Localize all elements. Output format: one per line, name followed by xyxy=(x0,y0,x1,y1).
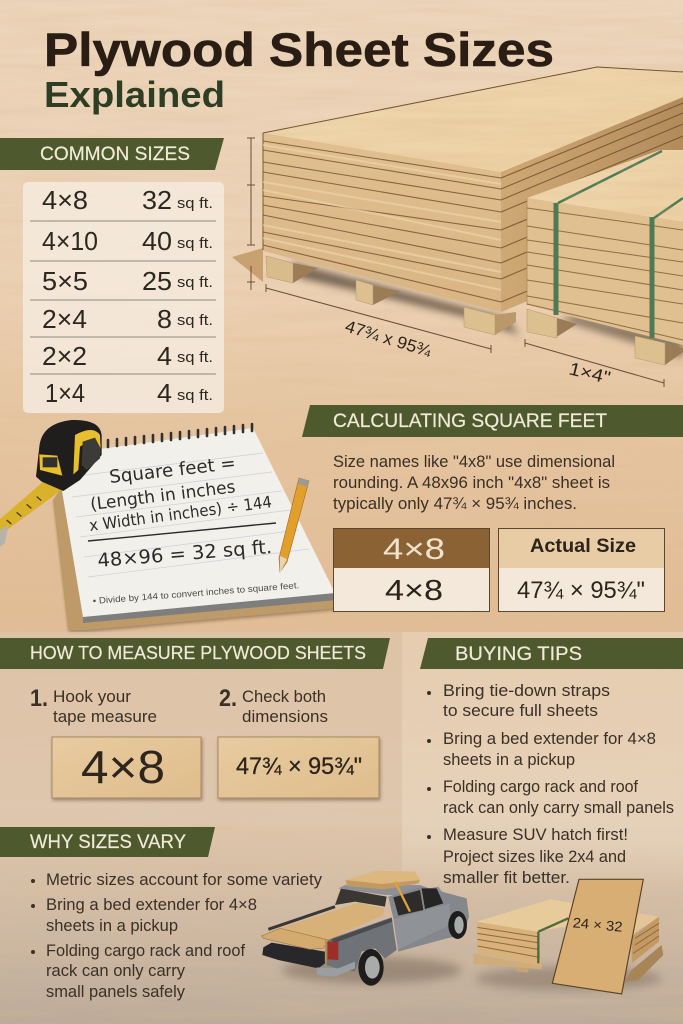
wood sample: actual: 47¾ × 95¾" xyxy=(236,753,362,780)
panel: common sizes xyxy=(0,138,224,413)
comparison box: nominal xyxy=(334,528,490,612)
pallet feet xyxy=(527,309,683,365)
heading: calculating square feet xyxy=(302,405,683,437)
illustration: large plywood stack on pallet xyxy=(232,67,683,335)
formula text: • Divide by 144 to convert inches to square feet. xyxy=(92,580,300,606)
rear wheel xyxy=(358,949,384,986)
heading: why sizes vary xyxy=(0,827,215,857)
dimension lines and labels xyxy=(247,138,664,388)
panel: why sizes vary xyxy=(0,827,322,1001)
step 2: 2. xyxy=(219,685,237,712)
sizes table: 8 xyxy=(157,304,172,334)
panel: how to measure plywood sheets xyxy=(0,632,402,825)
pallet feet xyxy=(266,256,516,335)
illustration: pickup truck with plywood xyxy=(262,871,469,986)
strap xyxy=(538,918,568,963)
formula text xyxy=(88,453,300,606)
heading: common sizes xyxy=(0,138,224,170)
formula text: x Width in inches) ÷ 144 xyxy=(88,492,273,535)
bed rail xyxy=(268,907,335,929)
explanation text: rounding. A 48x96 inch "4x8" sheet is xyxy=(333,473,610,492)
icon: tape measure xyxy=(0,420,102,547)
reasons list: small panels safely xyxy=(46,982,185,1001)
sizes table: sq ft. xyxy=(177,349,213,366)
comparison box: nominal: 4×8 xyxy=(383,533,445,566)
plywood grain on stack tops xyxy=(264,68,683,216)
tips list: Project sizes like 2x4 and xyxy=(443,847,626,866)
sizes table: 2×4 xyxy=(42,304,87,334)
straps xyxy=(395,882,410,912)
tips list: rack can only carry small panels xyxy=(443,798,674,817)
sizes table: sq ft. xyxy=(177,274,213,291)
stack xyxy=(477,922,542,967)
plywood on roof xyxy=(346,880,420,889)
front wheel xyxy=(448,911,467,939)
comparison box: nominal: 4×8 xyxy=(385,575,443,607)
illustration: notepad with formula xyxy=(53,424,337,630)
dimension lines and labels: 1×4" xyxy=(567,358,613,388)
formula text: (Length in inches xyxy=(89,477,237,515)
sizes table: 32 xyxy=(142,185,172,215)
sizes table xyxy=(23,182,224,413)
icon: pencil xyxy=(279,478,309,573)
sizes table: sq ft. xyxy=(177,235,213,252)
title: Plywood Sheet Sizes xyxy=(44,23,554,76)
truck body xyxy=(327,917,397,972)
heading: how to measure: HOW TO MEASURE PLYWOOD SHEETS xyxy=(30,643,366,663)
tailgate xyxy=(262,943,325,968)
panel: calculating square feet xyxy=(302,405,683,612)
dimension lines and labels: 47¾ x 95¾ xyxy=(343,317,434,361)
tips list: sheets in a pickup xyxy=(443,750,575,769)
comparison box: actual size: 47¾ × 95¾" xyxy=(517,577,645,604)
explanation text: typically only 47¾ × 95¾ inches. xyxy=(333,494,577,513)
step 1: 1. xyxy=(30,685,48,712)
step 2: dimensions xyxy=(242,707,328,726)
heading: common sizes: COMMON SIZES xyxy=(40,144,190,165)
rear bumper xyxy=(317,962,355,977)
leaning panel xyxy=(552,879,643,994)
comparison box: actual size: Actual Size xyxy=(530,536,636,557)
reasons list: Metric sizes account for some variety xyxy=(46,870,322,889)
tips list: to secure full sheets xyxy=(443,701,598,720)
tips list: Measure SUV hatch first! xyxy=(443,825,628,844)
step 1: Hook your xyxy=(53,687,131,706)
tips list: Folding cargo rack and roof xyxy=(443,777,638,796)
wood sample: 4x8 xyxy=(52,737,201,798)
sizes table: 4 xyxy=(157,341,172,371)
sizes table: sq ft. xyxy=(177,195,213,212)
sizes table: sq ft. xyxy=(177,387,213,404)
step 1: tape measure xyxy=(53,707,157,726)
title: Explained xyxy=(44,74,225,115)
pallet xyxy=(517,965,528,973)
step 2 xyxy=(219,685,328,726)
rear window and roof xyxy=(335,888,387,907)
heading: buying tips xyxy=(420,638,683,669)
reasons list xyxy=(31,870,322,1001)
formula text: 48×96 = 32 sq ft. xyxy=(97,536,273,572)
explanation text: Size names like "4x8" use dimensional xyxy=(333,452,615,471)
step 1 xyxy=(30,685,157,726)
sizes table: 1×4 xyxy=(45,378,85,408)
straps xyxy=(558,151,683,218)
title xyxy=(44,23,554,115)
cab windows xyxy=(393,890,423,916)
sizes table: 4×10 xyxy=(42,226,98,256)
tips list: smaller fit better. xyxy=(443,868,570,887)
formula text: Square feet = xyxy=(108,453,237,488)
sizes table: 4×8 xyxy=(42,185,88,215)
sizes table: 2×2 xyxy=(42,341,87,371)
wood sample: 4x8: 4×8 xyxy=(81,741,165,793)
sizes table: 40 xyxy=(142,226,172,256)
plywood in bed xyxy=(280,903,384,940)
heading: how to measure xyxy=(0,638,390,669)
reasons list: rack can only carry xyxy=(46,961,185,980)
reasons list: sheets in a pickup xyxy=(46,916,178,935)
step 2: Check both xyxy=(242,687,326,706)
sizes table: 4 xyxy=(157,378,172,408)
tips list: Bring tie-down straps xyxy=(443,681,610,700)
tips list xyxy=(427,681,674,887)
spiral binding xyxy=(108,424,252,447)
sizes table: sq ft. xyxy=(177,312,213,329)
explanation text xyxy=(333,452,615,513)
reasons list: Bring a bed extender for 4×8 xyxy=(46,895,257,914)
sizes table: 25 xyxy=(142,266,172,296)
illustration: small panel stack with 24x32 panel xyxy=(473,879,663,994)
heading: calculating square feet: CALCULATING SQUARE FEET xyxy=(333,411,607,432)
reasons list: Folding cargo rack and roof xyxy=(46,941,245,960)
wood sample: actual xyxy=(218,737,379,798)
tips list: Bring a bed extender for 4×8 xyxy=(443,729,656,748)
illustration: second strapped stack xyxy=(527,150,683,365)
illustration: small panel stack with 24x32 panel: 24 × 32 xyxy=(572,914,623,935)
heading: why sizes vary: WHY SIZES VARY xyxy=(30,832,186,853)
panel: buying tips xyxy=(402,632,683,894)
heading: buying tips: BUYING TIPS xyxy=(455,644,582,665)
tail light xyxy=(328,942,338,960)
sizes table: 5×5 xyxy=(42,266,88,296)
comparison box: actual size xyxy=(498,528,664,612)
